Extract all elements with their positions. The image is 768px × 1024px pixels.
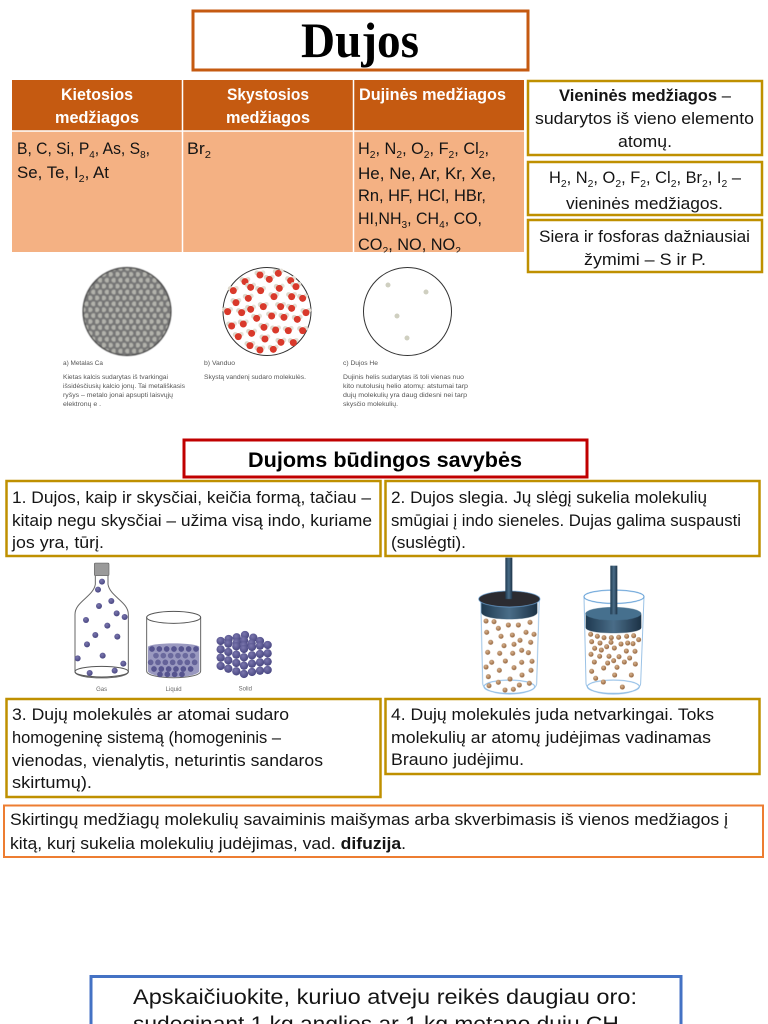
examples box: 2 — [702, 178, 708, 190]
column: gases: 2 — [424, 149, 430, 161]
diagram: helium atoms: kito nutolusių helio atomų: atstumai tarp — [343, 383, 468, 390]
column: solids — [17, 86, 150, 185]
property 1 box: 1. Dujos, kaip ir skysčiai, keičia formą, tačiau – — [12, 488, 372, 507]
column: solids: medžiagos — [55, 109, 139, 127]
column: gases: 2 — [479, 149, 485, 161]
column: gases: Rn, HF, HCl, HBr, — [358, 186, 486, 205]
heading: properties of gases — [184, 440, 587, 477]
examples box: , Cl — [646, 168, 671, 187]
diagram: metal calcium particles: elektronų e . — [63, 401, 101, 408]
column: gases: 2 — [396, 149, 402, 161]
column: solids: , As, S — [95, 139, 140, 158]
column: solids: 2 — [79, 173, 85, 185]
column: solids: 4 — [89, 149, 95, 161]
property 3 box: 3. Dujų molekulės ar atomai sudaro — [12, 705, 289, 724]
diagram: helium atoms: dujų molekulių yra daug didesni nei tarp — [343, 392, 467, 399]
column: liquids: Br — [187, 139, 204, 158]
examples box: , F — [621, 168, 640, 187]
definition box: simple substances — [528, 81, 762, 155]
sulfur and phosphorus note box — [528, 220, 762, 272]
bottle with gas: Gas — [96, 687, 107, 693]
column: gases: 3 — [401, 219, 407, 231]
diagram: water molecules: Skystą vandenį sudaro molekulės. — [204, 374, 306, 381]
property 4 box — [386, 699, 760, 774]
sulfur and phosphorus note box: žymimi – S ir P. — [584, 250, 706, 269]
examples box: , I — [708, 168, 722, 187]
column: gases: 2 — [370, 149, 376, 161]
right cylinder — [584, 566, 644, 694]
property 3 box: vienodas, vienalytis, neturintis sandaros — [12, 751, 323, 770]
property 2 box: smūgiai į indo sieneles. Dujas galima suspausti — [391, 511, 741, 530]
examples box: 2 — [722, 178, 727, 190]
property 3 box — [6, 699, 380, 797]
column: gases: , CH — [407, 209, 439, 228]
exercise box: Apskaičiuokite, kuriuo atveju reikės daugiau oro: — [133, 985, 637, 1009]
property 2 box: (suslėgti). — [391, 533, 466, 552]
property 2 box — [386, 481, 760, 556]
cube of solid particles — [216, 631, 272, 692]
column: liquids: Skystosios — [227, 86, 309, 104]
definition box: simple substances: Vieninės medžiagos – — [559, 86, 732, 105]
examples box: , Br — [676, 168, 702, 187]
examples box — [528, 162, 762, 215]
column: gases: , O — [402, 139, 424, 158]
property 3 box: skirtumų). — [12, 773, 92, 792]
property 4 box: 4. Dujų molekulės juda netvarkingai. Toks — [391, 705, 714, 724]
diagram: water molecules: b) Vanduo — [204, 360, 235, 367]
column: gases: 2 — [382, 245, 388, 257]
column: gases: CO — [358, 235, 383, 254]
heading: properties of gases: Dujoms būdingos savybės — [248, 449, 522, 472]
column: solids: , — [146, 139, 150, 158]
sulfur and phosphorus note box: Siera ir fosforas dažniausiai — [539, 227, 750, 246]
column: gases: , CO, — [445, 209, 482, 228]
column: gases: , Cl — [454, 139, 479, 158]
column: solids: , At — [85, 163, 109, 182]
examples box: 2 — [561, 178, 567, 190]
diffusion definition box — [4, 806, 763, 857]
cube of solid particles: Solid — [239, 686, 252, 692]
diagram: metal calcium particles: išsidėsčiusių kalcio jonų. Tai metališkasis — [63, 383, 185, 390]
title box — [193, 11, 528, 70]
examples box: 2 — [615, 178, 621, 190]
exercise box — [91, 976, 681, 1024]
column: gases: 2 — [449, 149, 454, 161]
column: gases: Dujinės medžiagos — [359, 86, 506, 104]
diagram: helium atoms: Dujinis helis sudarytas iš toli vienas nuo — [343, 374, 464, 381]
column: solids: 8 — [140, 149, 146, 161]
column: solids: B, C, Si, P — [17, 139, 94, 158]
column: gases: , NO, NO — [388, 235, 455, 254]
examples box: 2 — [640, 178, 646, 190]
column: solids: Kietosios — [61, 86, 133, 104]
column: liquids: medžiagos — [226, 109, 310, 127]
examples box: , N — [567, 168, 588, 187]
property 1 box: kitaip negu skysčiai – užima visą indo, kuriame — [12, 511, 372, 530]
diagram: metal calcium particles: Kietas kalcis sudarytas iš tvarkingai — [63, 374, 168, 381]
title: Dujos — [301, 12, 419, 68]
column: solids: Se, Te, I — [17, 163, 78, 182]
diagram: metal calcium particles: a) Metalas Ca — [63, 360, 103, 367]
column: liquids — [187, 86, 310, 161]
diffusion definition box: kitą, kurį sukelia molekulių judėjimas, vad. difuzija. — [10, 834, 406, 853]
column: gases: HI,NH — [358, 209, 403, 228]
examples box: vieninės medžiagos. — [566, 194, 723, 213]
illustration: gas, liquid, solid particles — [75, 563, 272, 693]
examples box: H — [549, 168, 561, 187]
column: gases: , — [484, 139, 489, 158]
diagram: water molecules — [204, 268, 311, 381]
diagram: metal calcium particles — [63, 268, 185, 408]
property 2 box: 2. Dujos slegia. Jų slėgį sukelia molekulių — [391, 488, 707, 507]
column: gases: 4 — [439, 219, 445, 231]
examples box: – — [727, 168, 742, 187]
property 1 box: jos yra, tūrį. — [11, 533, 104, 552]
definition box: simple substances: sudarytos iš vieno elemento — [535, 109, 754, 128]
bottle with gas — [75, 563, 128, 693]
beaker with liquid — [147, 611, 201, 693]
column: gases: He, Ne, Ar, Kr, Xe, — [358, 164, 496, 183]
examples box: 2 — [588, 178, 594, 190]
property 3 box: homogeninę sistemą (homogeninis – — [12, 728, 282, 747]
examples box: 2 — [671, 178, 677, 190]
diagram: helium atoms — [343, 268, 468, 408]
column: gases: 2 — [455, 245, 461, 257]
definition box: simple substances: atomų. — [618, 132, 672, 151]
column: liquids: 2 — [205, 149, 211, 161]
column: gases — [358, 86, 506, 257]
examples box: , O — [593, 168, 615, 187]
diffusion definition box: Skirtingų medžiagų molekulių savaiminis maišymas arba skverbimasis iš vienos medžiagos į — [10, 810, 728, 829]
diagram: helium atoms: c) Dujos He — [343, 360, 378, 367]
left cylinder — [479, 558, 540, 694]
illustration: gas compressed by pistons — [479, 558, 644, 694]
column: gases: H — [358, 139, 370, 158]
beaker with liquid: Liquid — [166, 687, 182, 693]
property 1 box — [6, 481, 380, 556]
diagram: helium atoms: skysčio molekulių. — [343, 401, 398, 408]
column: gases: , F — [430, 139, 449, 158]
table of substances — [12, 80, 524, 257]
property 4 box: molekulių ar atomų judėjimas vadinamas — [391, 728, 711, 747]
diagram: metal calcium particles: ryšys – metalo jonai apsupti laisvųjų — [63, 392, 173, 399]
property 4 box: Brauno judėjimu. — [391, 750, 524, 769]
column: gases: , N — [376, 139, 396, 158]
